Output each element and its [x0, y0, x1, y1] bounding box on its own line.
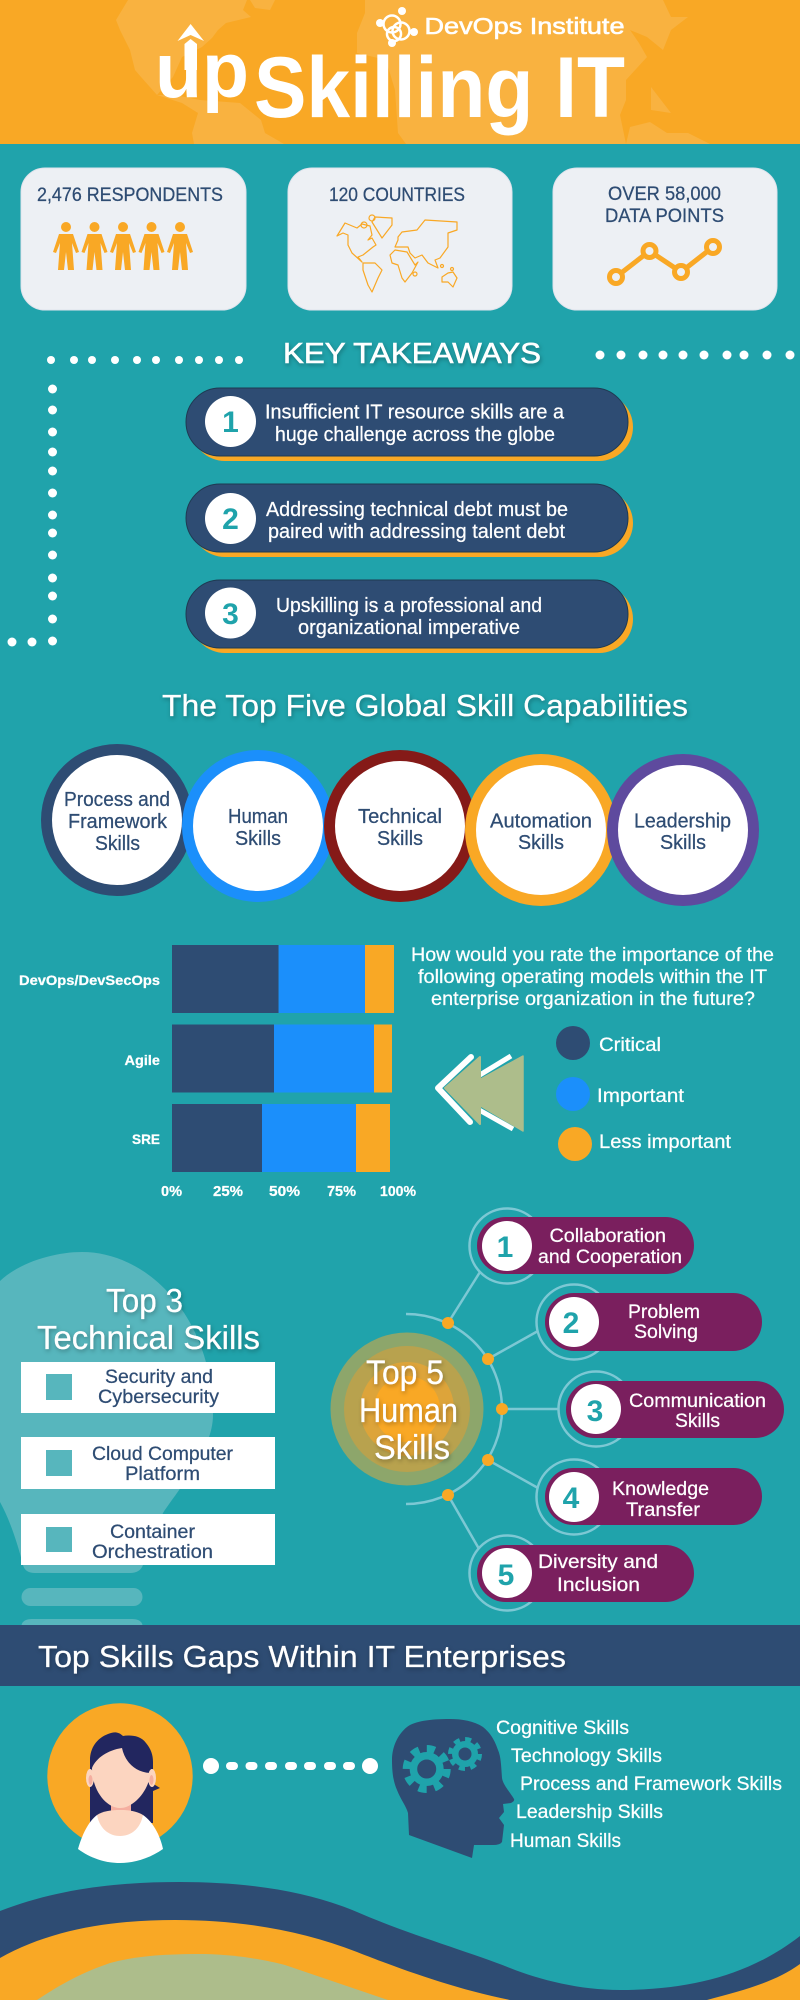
list: skills gaps: Technology Skills — [511, 1745, 662, 1767]
legend: less important — [558, 1127, 732, 1161]
human skill 2: Problem — [628, 1301, 700, 1323]
legend: critical — [556, 1026, 661, 1060]
capability circle: leadership: Skills — [660, 832, 706, 854]
header banner — [0, 0, 800, 144]
technical skill 1 — [21, 1362, 275, 1413]
human skill 1 — [470, 1208, 694, 1284]
dotted frame — [8, 350, 794, 646]
icon: up arrow — [178, 24, 204, 70]
technical skill 3: Container — [110, 1521, 195, 1543]
section banner: top skills gaps — [0, 1625, 800, 1686]
takeaway 2 — [186, 484, 633, 557]
arrow: double chevron left — [438, 1056, 523, 1131]
chart question: following operating models within the IT — [418, 966, 767, 988]
heading: top 3 technical skills: Technical Skills — [37, 1319, 260, 1356]
takeaway 1: 1 — [222, 406, 239, 439]
technical skill 2: Cloud Computer — [92, 1443, 234, 1465]
human skill 2: Solving — [634, 1321, 698, 1343]
list: skills gaps: Process and Framework Skills — [520, 1773, 782, 1795]
human skill 1: Collaboration — [550, 1225, 666, 1247]
capability circle: process and framework — [41, 744, 193, 896]
human skill 4: 4 — [563, 1482, 580, 1515]
title skilling it: Skilling IT — [254, 40, 625, 136]
takeaway 3 — [186, 580, 633, 653]
human skill 4: Transfer — [626, 1499, 701, 1521]
icon: devops logo — [376, 7, 418, 47]
takeaway 3: organizational imperative — [298, 617, 520, 639]
dotted connector — [203, 1758, 378, 1774]
icon: lightbulb backdrop — [0, 1252, 213, 1625]
capability circle: automation: Automation — [490, 810, 592, 832]
capability circle: human: Skills — [235, 828, 281, 850]
icon: line chart — [610, 240, 720, 284]
stat card: countries — [288, 168, 512, 310]
human skill 5 — [470, 1536, 694, 1610]
bar: agile — [124, 1024, 392, 1092]
bar: devops: DevOps/DevSecOps — [19, 972, 160, 988]
stacked bar chart — [19, 945, 416, 1200]
countries label: 120 COUNTRIES — [329, 185, 465, 206]
axis labels: 0% — [161, 1183, 182, 1200]
human skill 1: and Cooperation — [538, 1246, 682, 1268]
bar: agile: Agile — [124, 1052, 160, 1068]
list: skills gaps: Human Skills — [510, 1830, 621, 1852]
technical skill 1: Security and — [105, 1366, 213, 1388]
technical skill 1: Cybersecurity — [98, 1386, 219, 1408]
axis labels: 25% — [213, 1183, 243, 1200]
icon: head with gears — [392, 1719, 514, 1858]
stat card: data points — [553, 168, 777, 310]
human skill 4 — [536, 1460, 762, 1534]
heading: top 3 technical skills: Top 3 — [106, 1282, 183, 1319]
list: skills gaps: Leadership Skills — [516, 1801, 663, 1823]
takeaway 1: huge challenge across the globe — [275, 424, 555, 446]
data points label: OVER 58,000 — [608, 184, 721, 205]
axis labels: 100% — [380, 1183, 416, 1200]
capability circle: process and framework: Framework — [68, 811, 168, 833]
list: skills gaps — [496, 1717, 782, 1852]
capability circle: automation — [465, 754, 617, 906]
technical skill 3 — [21, 1514, 275, 1565]
capability circle: technical — [324, 750, 476, 902]
heading: top five global skill capabilities: The Top Five Global Skill Capabilities — [162, 688, 688, 723]
legend: less important: Less important — [599, 1131, 732, 1153]
hub: top 5 human skills: Skills — [374, 1429, 450, 1467]
human skill 5: Inclusion — [557, 1574, 640, 1596]
capability circle: human — [182, 750, 334, 902]
takeaway 2: Addressing technical debt must be — [266, 499, 568, 521]
bar: sre — [132, 1104, 390, 1172]
hub: top 5 human skills: Top 5 — [366, 1354, 444, 1392]
human skill 5: Diversity and — [538, 1551, 658, 1573]
bottom waves — [0, 1882, 800, 2000]
takeaway 1: Insufficient IT resource skills are a — [265, 402, 565, 424]
data points label line two: DATA POINTS — [605, 206, 724, 227]
list: skills gaps: Cognitive Skills — [496, 1717, 629, 1739]
legend: important — [556, 1077, 685, 1111]
icon: woman avatar — [47, 1703, 193, 1863]
legend: important: Important — [597, 1085, 685, 1107]
heading: top 3 technical skills — [37, 1282, 260, 1356]
capability circle: leadership — [607, 754, 759, 906]
human skill 3: Skills — [675, 1410, 720, 1432]
chart question: How would you rate the importance of the — [411, 944, 774, 966]
axis labels — [161, 1183, 416, 1200]
hub: top 5 human skills — [330, 1332, 484, 1486]
bar: devops — [19, 945, 394, 1013]
icon: five people — [53, 222, 193, 270]
takeaway 1 — [186, 388, 633, 461]
world map watermark — [116, 0, 710, 144]
takeaway 3: 3 — [222, 598, 239, 631]
human skill 5: 5 — [498, 1559, 514, 1592]
human skill 4: Knowledge — [612, 1478, 709, 1500]
icon: world map — [337, 215, 457, 292]
capability circle: process and framework: Skills — [95, 833, 140, 855]
human skill 3 — [558, 1372, 784, 1446]
human skill 2: 2 — [563, 1307, 579, 1340]
stat card: respondents — [21, 168, 246, 310]
takeaway 2: 2 — [222, 503, 239, 536]
connectors: arc and spokes — [406, 1272, 559, 1548]
capability circle: technical: Skills — [377, 828, 423, 850]
brand name: DevOps Institute — [424, 13, 624, 39]
technical skill 2: Platform — [125, 1463, 200, 1485]
takeaway 3: Upskilling is a professional and — [276, 595, 542, 617]
capability circle: process and framework: Process and — [64, 789, 170, 811]
capability circle: human: Human — [228, 806, 288, 828]
title up: up — [155, 26, 249, 114]
heading: key takeaways: KEY TAKEAWAYS — [283, 338, 541, 370]
human skill 3: Communication — [629, 1390, 766, 1412]
chart question: enterprise organization in the future? — [431, 988, 755, 1010]
hub: top 5 human skills: Human — [359, 1392, 458, 1430]
technical skill 2 — [21, 1437, 275, 1489]
bar: sre: SRE — [132, 1131, 160, 1147]
human skill 2 — [536, 1284, 762, 1360]
capability circle: leadership: Leadership — [634, 810, 731, 832]
capability circle: technical: Technical — [358, 806, 442, 828]
legend — [556, 1026, 732, 1161]
technical skill 3: Orchestration — [92, 1541, 213, 1563]
takeaway 2: paired with addressing talent debt — [268, 521, 565, 543]
human skill 3: 3 — [587, 1395, 603, 1428]
capability circle: automation: Skills — [518, 832, 564, 854]
respondents label: 2,476 RESPONDENTS — [37, 185, 223, 206]
axis labels: 75% — [327, 1183, 356, 1200]
axis labels: 50% — [269, 1183, 300, 1200]
chart question — [411, 944, 774, 1010]
section banner: top skills gaps: Top Skills Gaps Within IT Enterprises — [38, 1639, 566, 1674]
human skill 1: 1 — [497, 1231, 513, 1264]
legend: critical: Critical — [599, 1034, 661, 1056]
